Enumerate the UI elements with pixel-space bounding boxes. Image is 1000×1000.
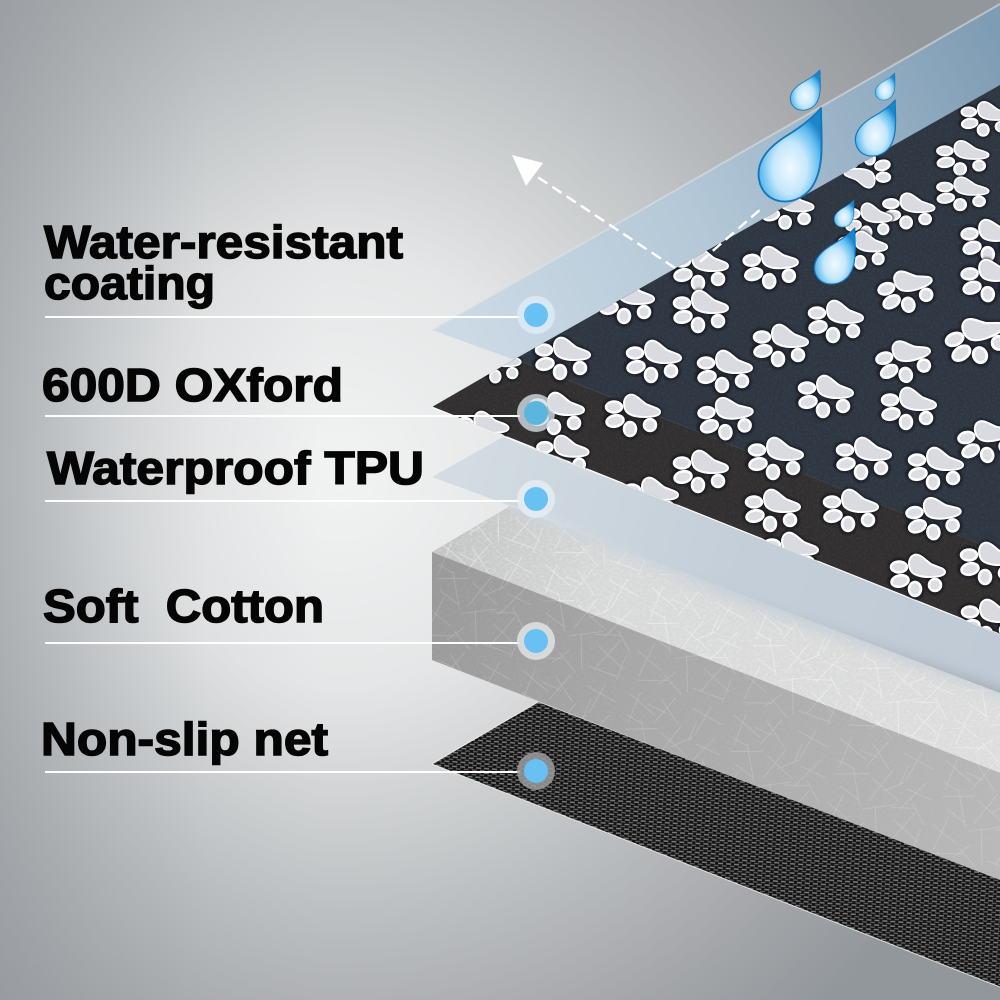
label: water-resistant coating (44, 216, 520, 317)
label: 600D Oxford: 600D OXford (42, 359, 343, 411)
label: water-resistant coating: Water-resistant (44, 216, 403, 268)
marker dot: TPU (517, 480, 555, 518)
arrow: vapour escaping through coating (512, 155, 762, 268)
cotton top face (432, 500, 1000, 780)
layer: water-resistant coating (432, 4, 1000, 360)
layer: 600D oxford fabric (432, 85, 1000, 644)
label: non-slip net: Non-slip net (41, 713, 328, 765)
label: waterproof TPU: Waterproof TPU (47, 442, 424, 494)
navy top face (515, 85, 1000, 552)
layer: non-slip net (432, 702, 1000, 987)
layer: soft cotton (432, 500, 1000, 885)
brown front band (432, 359, 1000, 634)
label: soft cotton: Soft Cotton (43, 580, 324, 632)
marker dot: cotton (517, 622, 555, 660)
marker dot: net (517, 752, 555, 790)
marker dot: oxford (517, 394, 555, 432)
icon: water drops (759, 70, 896, 284)
label: water-resistant coating: coating (44, 257, 215, 309)
marker dot: coating (517, 296, 555, 334)
paw print pattern (454, 102, 1000, 644)
cotton side face (432, 550, 1000, 885)
layer: waterproof TPU (432, 437, 1000, 710)
